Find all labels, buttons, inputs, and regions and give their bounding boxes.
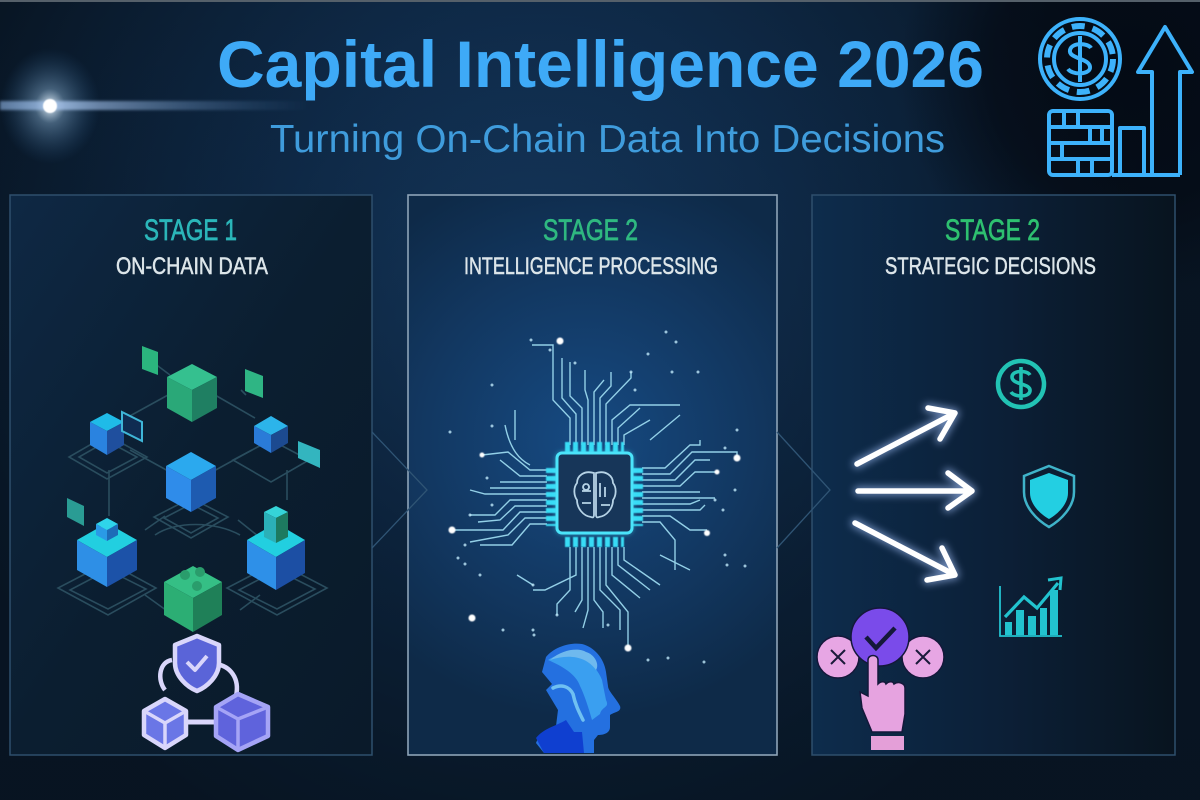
stage 3 heading: STRATEGIC DECISIONS — [885, 253, 1096, 280]
arrow: chevron stage 2 to stage 3 — [777, 432, 830, 548]
subtitle: Turning On-Chain Data Into Decisions — [270, 118, 945, 161]
bright nodes — [448, 338, 740, 652]
network platforms and links — [58, 360, 327, 615]
cube green top — [167, 364, 217, 422]
cube blue upper left — [90, 413, 124, 455]
cube blue upper right — [254, 416, 288, 453]
stage 2 heading: INTELLIGENCE PROCESSING — [464, 253, 718, 280]
title: Capital Intelligence 2026 — [217, 27, 984, 101]
lens flare — [0, 48, 310, 164]
stage 1 label: STAGE 1 — [144, 214, 237, 247]
arrow to capital — [857, 408, 955, 464]
glowing decision arrows — [855, 408, 972, 580]
panel: stage 1 on-chain data — [10, 195, 372, 755]
scattered nodes — [450, 332, 745, 662]
arrow to growth — [855, 523, 955, 580]
stage 3 label: STAGE 2 — [945, 214, 1040, 247]
icon: growth chart — [1000, 578, 1062, 636]
icon: dollar coin — [998, 361, 1044, 407]
icon: shield with linked blocks — [144, 636, 268, 750]
stage 1 heading: ON-CHAIN DATA — [116, 253, 268, 280]
panel: stage 3 strategic decisions — [812, 195, 1175, 755]
icon: blue AI head — [536, 644, 620, 753]
cube green lower — [164, 566, 222, 632]
stage 2 label: STAGE 2 — [543, 214, 638, 247]
circuit traces — [452, 345, 737, 648]
icon: hand choosing option — [817, 608, 944, 750]
blockchain network illustration — [58, 346, 327, 632]
arrow: chevron stage 1 to stage 2 — [372, 432, 427, 548]
AI chip with circuit traces — [448, 332, 745, 662]
icon: shield — [1024, 466, 1074, 527]
arrow to risk — [858, 473, 972, 508]
cube blue lower right — [247, 506, 305, 590]
data tags — [67, 346, 320, 526]
cube blue lower left — [77, 518, 137, 587]
cube blue centre — [166, 452, 216, 512]
icon: coin, bricks and growth arrow — [1040, 19, 1192, 175]
chip pins glow — [551, 447, 638, 542]
chip body — [557, 453, 632, 533]
panel: stage 2 intelligence processing — [408, 195, 777, 755]
icon: brain — [574, 472, 616, 517]
